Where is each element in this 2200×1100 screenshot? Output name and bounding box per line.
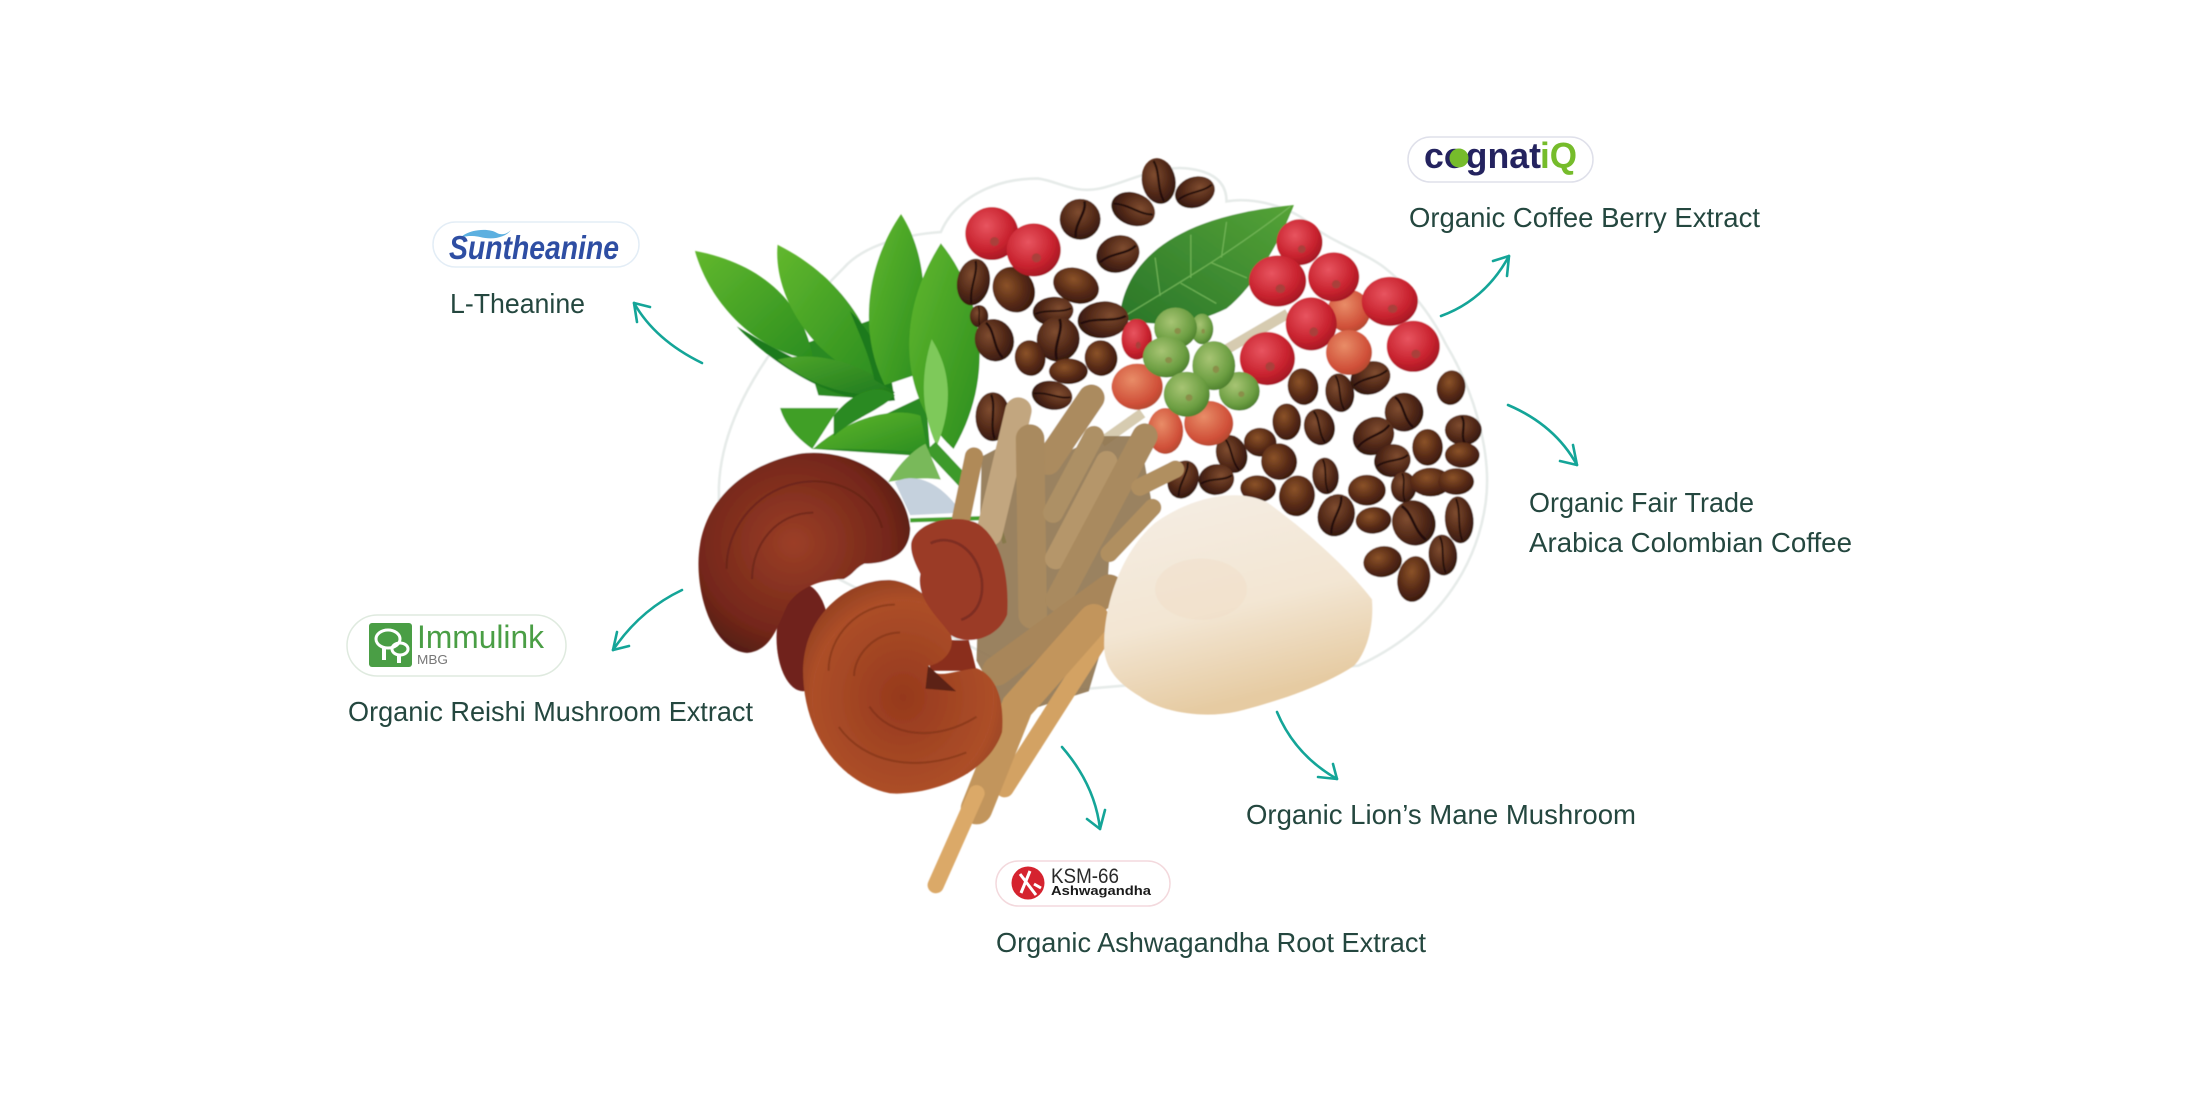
label: Organic Lion’s Mane Mushroom bbox=[1246, 799, 1636, 830]
arrow bbox=[1062, 747, 1105, 829]
logo pill: Immulink: Immulink bbox=[417, 619, 545, 655]
logo pill: Suntheanine: Suntheanine bbox=[449, 229, 619, 266]
label: Organic Coffee Berry Extract bbox=[1409, 202, 1760, 233]
label: L-Theanine bbox=[450, 288, 585, 319]
arrow bbox=[634, 303, 702, 363]
logo pill: CognatIQ: iQ bbox=[1540, 135, 1577, 176]
ingredient illustration bbox=[695, 155, 1487, 885]
coffee beans bbox=[953, 155, 1482, 604]
coffee berries bbox=[965, 207, 1440, 454]
callout: Reishi bbox=[347, 590, 753, 727]
plate blob bbox=[719, 168, 1487, 691]
tea leaves bbox=[695, 214, 1005, 543]
logo pill: Immulink bbox=[347, 615, 566, 676]
coffee leaf bbox=[1119, 205, 1294, 324]
ashwagandha roots bbox=[936, 398, 1176, 885]
label: Organic Ashwagandha Root Extract bbox=[996, 927, 1426, 958]
coffee stems bbox=[1102, 314, 1288, 442]
callout: Ashwagandha bbox=[996, 747, 1426, 958]
callout: L-Theanine bbox=[433, 222, 702, 363]
arrow bbox=[1277, 712, 1337, 779]
callout: Coffee Berry bbox=[1408, 135, 1760, 316]
logo pill: KSM-66: KSM-66 bbox=[1051, 865, 1119, 888]
label line 2: Arabica Colombian Coffee bbox=[1529, 527, 1852, 558]
arrow bbox=[1441, 256, 1509, 316]
label: Organic Fair Trade bbox=[1529, 487, 1754, 518]
logo pill: KSM-66 bbox=[996, 861, 1170, 906]
callout: Arabica Coffee bbox=[1508, 405, 1852, 558]
label: Organic Reishi Mushroom Extract bbox=[348, 696, 753, 727]
arrow bbox=[1508, 405, 1577, 465]
logo pill: KSM-66: Ashwagandha bbox=[1051, 883, 1152, 898]
reishi mushrooms bbox=[698, 453, 1008, 793]
logo pill: CognatIQ bbox=[1408, 135, 1593, 182]
callout: Lion's Mane bbox=[1246, 712, 1636, 830]
lion's mane mushroom bbox=[1104, 495, 1372, 715]
logo pill: CognatIQ: cognat bbox=[1424, 135, 1541, 176]
logo pill: Immulink: MBG bbox=[417, 652, 448, 667]
arrow bbox=[613, 590, 682, 650]
